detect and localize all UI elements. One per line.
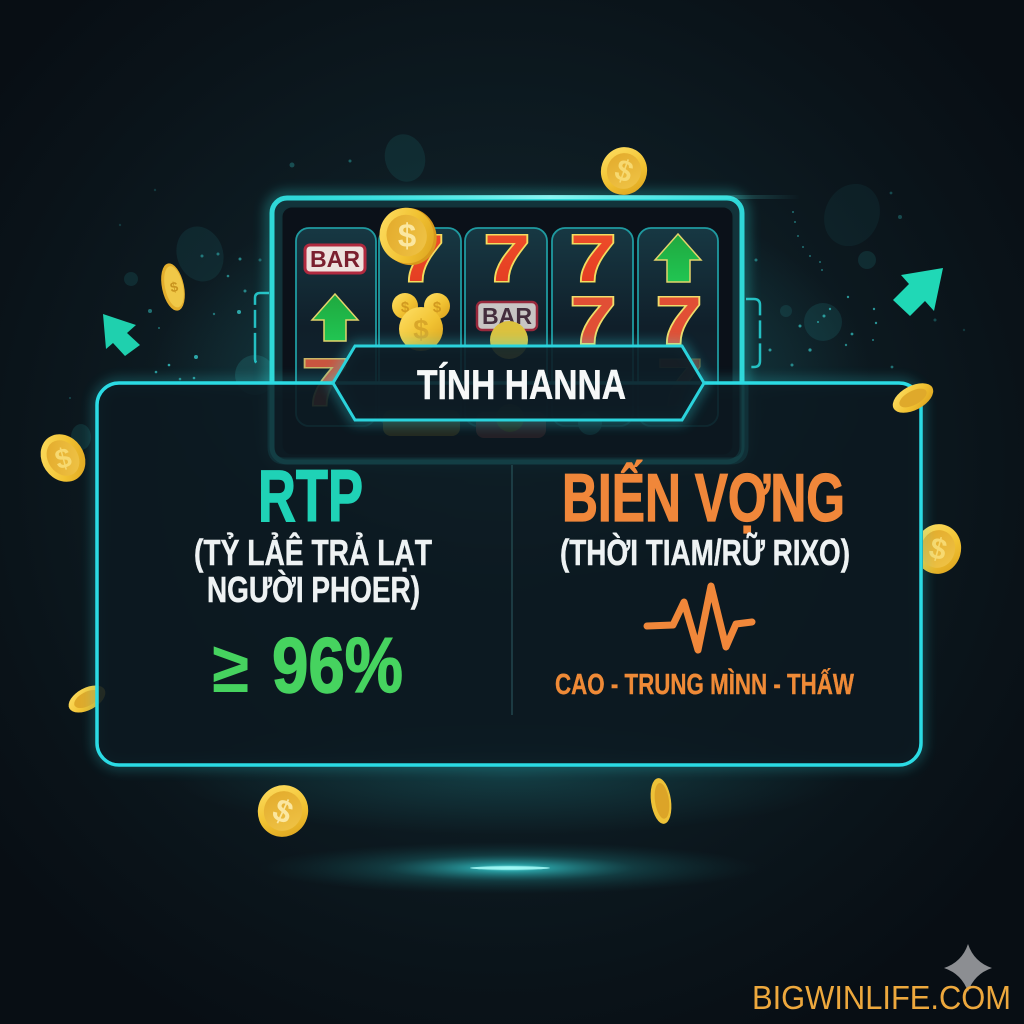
reel 2 xyxy=(379,221,461,426)
volatility heading: BIẾN VỢNG xyxy=(562,459,845,536)
icon: teal arrow left xyxy=(103,314,140,356)
coin: on reel 2: $ xyxy=(398,217,416,254)
seven symbol: 7 xyxy=(484,221,530,295)
coin: top: $ xyxy=(610,153,638,190)
coin: tilted left xyxy=(157,261,189,313)
greater-or-equal sign: ≥ xyxy=(212,628,249,708)
seven symbol: 7 xyxy=(570,283,616,357)
card fill xyxy=(97,383,921,765)
BAR symbol: BAR xyxy=(482,303,532,329)
brand footer: BIGWINLIFE.COM xyxy=(752,979,1011,1016)
floor light glow xyxy=(260,842,760,894)
coin: left: $ xyxy=(52,441,75,475)
icon: sparkle watermark xyxy=(944,944,992,992)
reel 1 xyxy=(296,228,376,426)
coin: bottom centre xyxy=(648,777,674,825)
coin: left xyxy=(31,425,95,491)
icon: teal arrow right xyxy=(893,268,943,316)
decorative particles and bokeh xyxy=(69,130,965,450)
machine inner screen xyxy=(282,207,733,455)
RTP value xyxy=(212,621,403,709)
ghost machine edge inside card xyxy=(271,383,745,461)
glow beneath card xyxy=(170,715,850,835)
text block: RTP column xyxy=(194,456,432,709)
side handle left xyxy=(255,293,269,364)
machine top light beam xyxy=(300,195,800,199)
side handle right xyxy=(746,299,760,367)
glow around slot machine xyxy=(150,180,870,580)
coin: flat upper right xyxy=(888,377,938,419)
coin: flat lower left xyxy=(64,680,110,718)
panel: slot machine xyxy=(255,195,800,462)
heading: hexagon banner xyxy=(333,346,704,420)
small coin xyxy=(490,321,528,359)
dimmed lower symbols xyxy=(383,404,602,438)
banner text: TÍNH HANNA xyxy=(417,361,626,408)
machine glow xyxy=(270,196,744,462)
coin cluster symbol: $ xyxy=(433,299,442,316)
volatility levels: CAO - TRUNG MÌNN - THẤW xyxy=(555,667,854,701)
seven symbol: 7 xyxy=(302,345,348,419)
green arrow symbol xyxy=(655,234,701,282)
RTP heading: RTP xyxy=(258,456,363,537)
divider xyxy=(511,465,513,715)
card border xyxy=(97,383,921,765)
coin cluster symbol xyxy=(392,293,450,351)
banner shape xyxy=(333,346,704,420)
floor light streak xyxy=(470,866,550,870)
seven symbol: 7 xyxy=(398,221,444,295)
machine frame xyxy=(272,198,742,462)
coin: top xyxy=(594,141,654,201)
RTP description line 2: NGƯỜI PHOER) xyxy=(207,568,420,610)
text block: volatility column xyxy=(555,459,854,701)
panel: main card xyxy=(97,383,921,765)
coin: bottom left xyxy=(249,777,317,845)
seven symbol: 7 xyxy=(656,283,702,357)
coin: bottom left: $ xyxy=(267,791,299,831)
coin: on reel 2 xyxy=(370,198,446,275)
icon: pulse line xyxy=(647,586,752,650)
coin cluster symbol: $ xyxy=(413,314,429,345)
volatility description: (THỜI TIAM/RỮ RIXO) xyxy=(560,531,850,573)
coin: tilted left: $ xyxy=(169,278,180,295)
reel 3 xyxy=(465,221,547,426)
seven symbol: 7 xyxy=(657,345,703,419)
reel 4 xyxy=(552,221,633,426)
green arrow symbol xyxy=(312,294,358,341)
RTP description line 1: (TỶ LẢÊ TRẢ LẠT xyxy=(194,531,432,573)
seven symbol: 7 xyxy=(570,221,616,295)
reel 5 xyxy=(638,228,718,426)
percent value: 96% xyxy=(272,621,403,709)
banner glow xyxy=(333,346,704,420)
coin: right edge xyxy=(923,524,962,574)
BAR symbol: BAR xyxy=(310,246,360,272)
coin cluster symbol: $ xyxy=(401,299,410,316)
card glow xyxy=(97,383,921,765)
coin: right edge: $ xyxy=(926,531,951,568)
